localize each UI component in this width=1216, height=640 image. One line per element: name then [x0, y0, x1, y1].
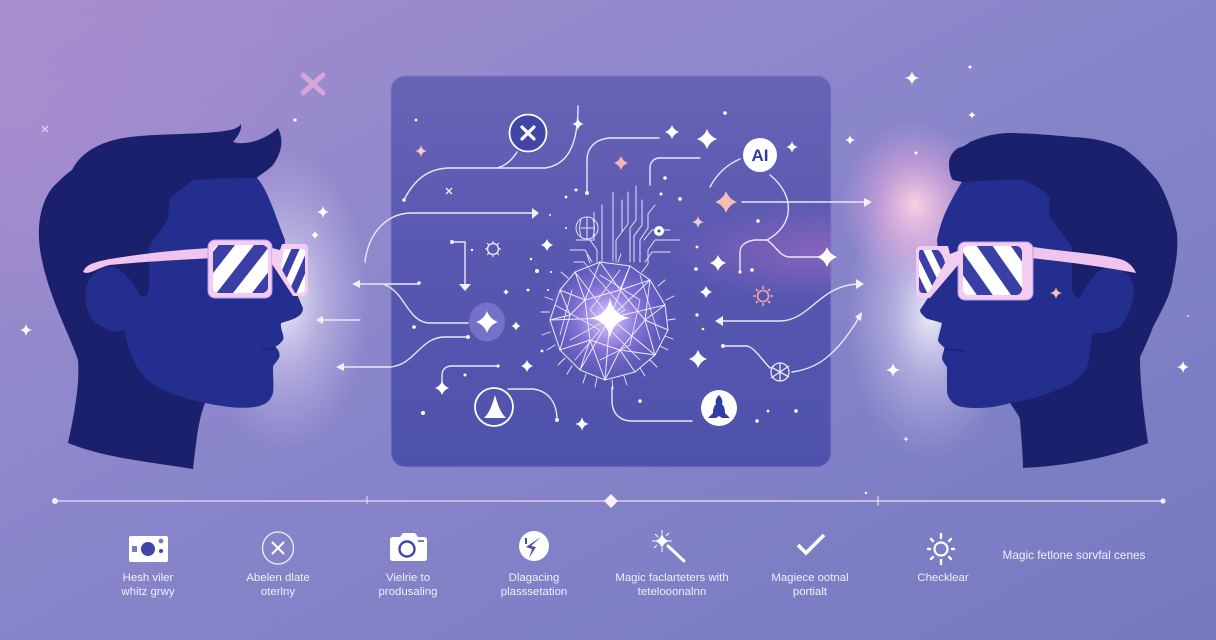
step 1 label: whitz grwy: [120, 586, 175, 598]
timeline: [52, 492, 1166, 508]
right small lens: [916, 246, 960, 298]
left glasses: [83, 240, 308, 298]
step 4 label: plasssetation: [501, 586, 567, 598]
icon: X circle: [510, 114, 546, 152]
left mouth line: [262, 348, 276, 350]
icon: cone circle: [475, 388, 513, 426]
background sparkles: [20, 66, 1189, 442]
step 8 label: Magic fetlone sorvfal cenes: [1003, 548, 1146, 562]
right temple arm: [1022, 245, 1136, 273]
step 6 label: Magiece ootnal: [771, 572, 849, 584]
step 5 label: tetelooonalnn: [638, 586, 706, 598]
right glasses: [916, 242, 1136, 300]
circuit node: [654, 226, 664, 236]
step 5 label: Magic faclarteters with: [615, 572, 729, 584]
step 5: [615, 530, 729, 598]
right hair and neck: [949, 133, 1177, 468]
step 6 label: portialt: [793, 586, 828, 598]
icon: sun: [928, 534, 954, 564]
icon: AI badge: [743, 138, 777, 172]
right mouth line: [944, 349, 964, 351]
icon: small gear: [485, 241, 501, 257]
central panel: [316, 76, 872, 468]
icon: magic wand: [652, 530, 684, 561]
icon: bolt disc: [519, 531, 549, 561]
step 2 label: oterlny: [261, 586, 295, 598]
step 2: [246, 532, 310, 598]
icon: camera: [390, 533, 427, 561]
step 1: [120, 536, 175, 598]
network connectors: [320, 106, 866, 421]
right main lens: [958, 242, 1033, 300]
step 4: [501, 531, 567, 598]
panel purple glow: [692, 213, 831, 292]
step 7 label: Checklear: [917, 572, 969, 584]
sphere core flare: [590, 298, 630, 338]
step 4 label: Dlagacing: [509, 572, 559, 584]
left face: [85, 178, 303, 408]
right face: [920, 180, 1134, 408]
connector arrowheads: [316, 191, 872, 422]
icon: sparkle badge: [469, 302, 505, 342]
icon: check mark: [798, 535, 824, 553]
left head silhouette: [39, 124, 308, 469]
icon: pink sun: [753, 286, 773, 306]
icon: X circle: [262, 532, 294, 564]
step 3: [379, 533, 437, 598]
left hair and neck: [39, 124, 281, 469]
icon: AI badge: AI: [752, 146, 768, 165]
right head silhouette: [916, 133, 1177, 468]
left main lens: [208, 240, 272, 298]
circuit tree: [570, 186, 680, 270]
icon: photo card: [129, 536, 168, 562]
network sphere: [541, 254, 675, 389]
step 1 label: Hesh viler: [123, 572, 174, 584]
icon: flower knot: [771, 363, 789, 381]
left temple arm: [83, 248, 214, 273]
panel sparkles and dots: [412, 111, 837, 431]
left small lens: [272, 244, 308, 296]
icon: rocket badge: [701, 390, 737, 426]
step 7: [917, 534, 969, 584]
right sparkle on face: [1050, 287, 1062, 299]
step 2 label: Abelen dlate: [246, 572, 310, 584]
step 3 label: produsaling: [379, 586, 437, 598]
step 6: [771, 535, 849, 598]
step 3 label: Vielrie to: [386, 572, 430, 584]
